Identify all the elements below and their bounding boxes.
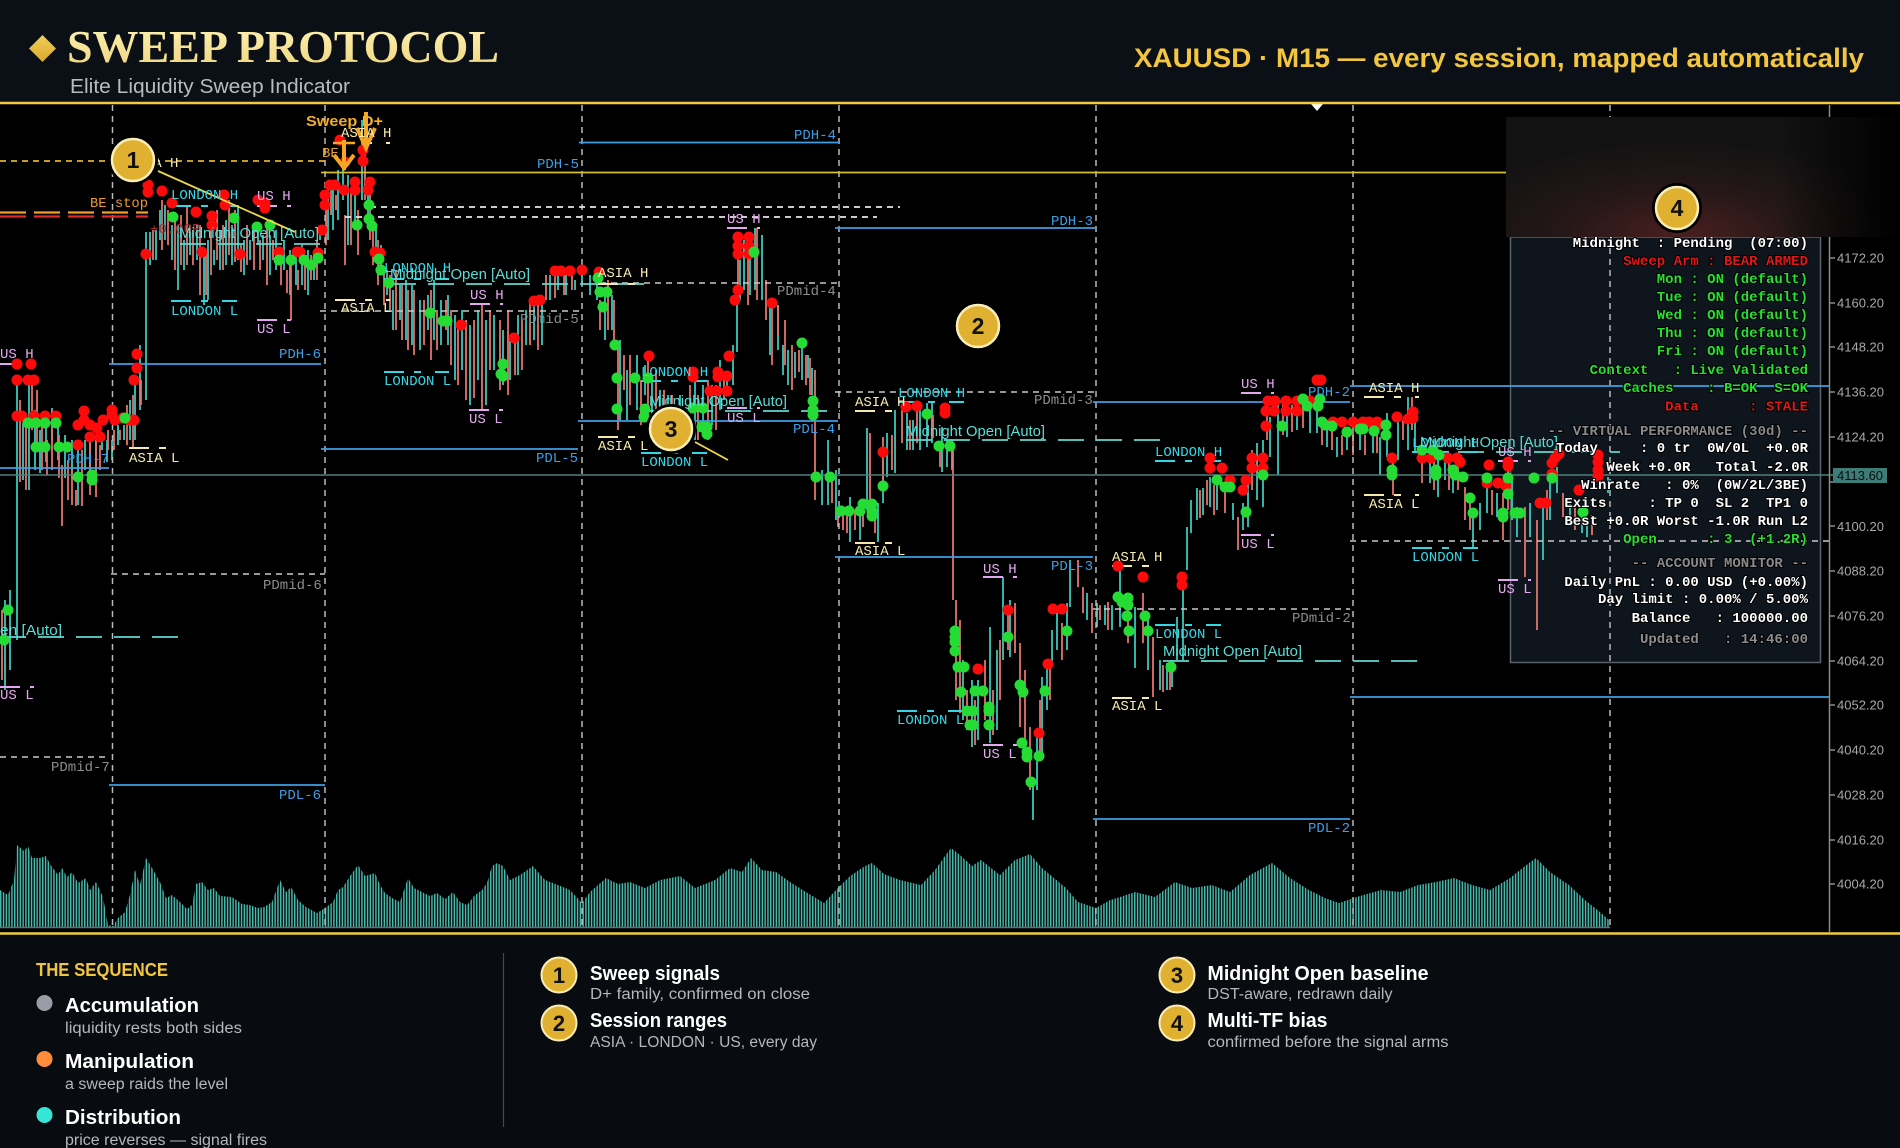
subtitle: Elite Liquidity Sweep Indicator bbox=[70, 76, 350, 98]
session labels: ASIA: ASIA L bbox=[341, 301, 391, 317]
legend item 1 bbox=[542, 958, 810, 1003]
previous-day level lines bbox=[0, 142, 1829, 819]
session labels: LONDON bbox=[171, 188, 1479, 729]
step: distribution bbox=[36, 1107, 267, 1148]
level labels: PDmid: PDmid-6 bbox=[263, 578, 322, 594]
session bracket ticks bbox=[0, 143, 1531, 745]
session labels: ASIA: ASIA L bbox=[598, 439, 648, 455]
price axis: 4160.20 bbox=[1837, 296, 1884, 310]
badge 2 bbox=[953, 301, 1003, 351]
panel text: status readout: Wed : ON (default) bbox=[1657, 308, 1808, 324]
step: accumulation: Accumulation bbox=[65, 995, 199, 1017]
session labels: US: US L bbox=[0, 688, 34, 704]
session labels: LONDON: LONDON H bbox=[384, 261, 451, 277]
level labels: PDH and PDL: PDL-4 bbox=[793, 422, 835, 438]
session labels: US: US H bbox=[983, 562, 1017, 578]
session labels: US: US H bbox=[257, 189, 291, 205]
session labels: ASIA: ASIA H bbox=[128, 156, 178, 172]
session labels: US: US H bbox=[727, 212, 761, 228]
chart background bbox=[0, 105, 1900, 932]
badge 1 bbox=[108, 135, 158, 185]
legend item 2: ASIA · LONDON · US, every day bbox=[590, 1034, 817, 1051]
level labels: PDH and PDL: PDH-4 bbox=[794, 128, 836, 144]
level labels: PDH and PDL: PDL-2 bbox=[1308, 821, 1350, 837]
level labels: PDmid: PDmid-4 bbox=[777, 284, 836, 300]
sequence heading: THE SEQUENCE bbox=[36, 960, 168, 980]
legend item 1: 1 bbox=[553, 963, 565, 988]
panel text: status readout: Today : 0 tr 0W/0L +0.0R bbox=[1556, 441, 1809, 457]
legend item 2 bbox=[542, 1006, 817, 1051]
legend item 2: Session ranges bbox=[590, 1010, 727, 1032]
session labels: US bbox=[0, 189, 1532, 763]
legend item 4: confirmed before the signal arms bbox=[1208, 1034, 1449, 1051]
price axis: 4124.20 bbox=[1837, 430, 1884, 444]
session labels: ASIA: ASIA H bbox=[341, 126, 391, 142]
session labels: US: US H bbox=[0, 347, 34, 363]
level labels: PDH and PDL: PDH-7 bbox=[67, 452, 109, 468]
level labels: PDmid: PDmid-2 bbox=[1292, 611, 1351, 627]
price axis: 4076.20 bbox=[1837, 608, 1884, 624]
session labels: LONDON: LONDON H bbox=[641, 365, 708, 381]
price axis: 4016.20 bbox=[1837, 832, 1884, 848]
top marker triangle bbox=[1311, 104, 1323, 111]
session labels: LONDON: LONDON H bbox=[898, 386, 965, 402]
panel: status background bbox=[1510, 237, 1820, 662]
badge 2: 2 bbox=[972, 313, 984, 339]
legend item 2: 2 bbox=[553, 1011, 565, 1036]
panel text: status readout: Open : 3 (+1.2R) bbox=[1623, 532, 1808, 548]
step: accumulation bbox=[36, 995, 242, 1037]
signal dots: bullish green bbox=[4, 205, 1583, 782]
header tagline: XAUUSD · M15 — every session, mapped automatically bbox=[1134, 43, 1864, 73]
midnight open labels bbox=[0, 225, 1558, 660]
midnight open labels: Midnight Open [Auto] bbox=[906, 423, 1045, 440]
panel text: status readout: Thu : ON (default) bbox=[1657, 326, 1808, 342]
panel text: status readout: Caches : B=OK S=OK bbox=[1623, 381, 1809, 397]
chart labels: sweep and stop: Sweep D+ bbox=[306, 113, 383, 130]
panel text: status readout: Updated : 14:46:00 bbox=[1640, 632, 1808, 648]
panel text: status readout: Fri : ON (default) bbox=[1657, 344, 1808, 360]
midnight open labels: Midnight Open [Auto] bbox=[649, 393, 787, 410]
legend item 4: Multi-TF bias bbox=[1208, 1010, 1328, 1032]
price axis: 4136.20 bbox=[1837, 384, 1884, 400]
annotation leader lines bbox=[158, 171, 728, 460]
icon: gold diamond bbox=[29, 35, 56, 62]
session labels: US: US H bbox=[1498, 445, 1532, 461]
step: accumulation: liquidity rests both sides bbox=[65, 1020, 242, 1037]
panel text: status readout: Daily PnL : 0.00 USD (+0.00%) bbox=[1564, 575, 1808, 591]
chart labels: sweep and stop: BE stop bbox=[90, 196, 148, 212]
price axis: 4004.20 bbox=[1837, 876, 1884, 892]
session labels: LONDON: LONDON L bbox=[897, 713, 964, 729]
session labels: LONDON: LONDON L bbox=[1155, 627, 1222, 643]
session labels: US: US L bbox=[727, 411, 761, 427]
panel text: status readout: Midnight : Pending (07:00) bbox=[1573, 236, 1808, 252]
legend item 3: 3 bbox=[1171, 963, 1183, 988]
session labels: US: US H bbox=[470, 288, 504, 304]
panel text: status readout bbox=[1548, 236, 1809, 648]
session labels: LONDON: LONDON L bbox=[641, 455, 708, 471]
session labels: US: US H bbox=[1241, 377, 1275, 393]
legend item 3: Midnight Open baseline bbox=[1208, 963, 1428, 985]
badge 3: 3 bbox=[665, 416, 677, 442]
price candles: bearish wicks bbox=[2, 130, 1592, 790]
level labels: PDH and PDL: PDL-3 bbox=[1051, 559, 1093, 575]
panel text: status readout: Best +0.0R Worst -1.0R Run L2 bbox=[1564, 514, 1808, 530]
session labels: ASIA: ASIA L bbox=[1112, 699, 1162, 715]
legend item 4: 4 bbox=[1171, 1011, 1184, 1036]
icon: sweep down arrows bbox=[333, 112, 375, 170]
price axis: 4148.20 bbox=[1837, 340, 1884, 354]
session labels: LONDON: LONDON L bbox=[1412, 550, 1479, 566]
panel text: status readout: Tue : ON (default) bbox=[1657, 290, 1808, 306]
midnight open labels: Midnight Open [Auto] bbox=[1163, 643, 1302, 660]
panel text: status readout: Balance : 100000.00 bbox=[1632, 611, 1808, 627]
badge 4: 4 bbox=[1671, 195, 1684, 221]
session labels: LONDON: LONDON H bbox=[171, 188, 238, 204]
level labels: PDH and PDL: PDH-2 bbox=[1308, 385, 1350, 401]
price candles: bullish wicks bbox=[5, 120, 1608, 820]
session labels: ASIA: ASIA H bbox=[1112, 550, 1162, 566]
price axis: 4172.20 bbox=[1837, 250, 1884, 266]
footer band bbox=[0, 935, 1900, 1148]
footer divider bbox=[502, 953, 504, 1127]
level labels: PDmid: PDmid-7 bbox=[51, 760, 110, 776]
price axis: 4100.20 bbox=[1837, 519, 1884, 534]
blurred redaction box bbox=[1506, 117, 1900, 237]
panel text: status readout: -- VIRTUAL PERFORMANCE (30d) -- bbox=[1548, 424, 1808, 440]
panel text: status readout: Context : Live Validated bbox=[1590, 363, 1808, 379]
badge 1: 1 bbox=[127, 147, 140, 173]
session labels: ASIA: ASIA L bbox=[1369, 497, 1419, 513]
session labels: US: US L bbox=[257, 322, 291, 338]
session labels: US: US L bbox=[469, 412, 503, 428]
badge 3 bbox=[646, 404, 696, 454]
legend item 1: D+ family, confirmed on close bbox=[590, 986, 810, 1003]
session separators bbox=[112, 105, 1610, 925]
header band bbox=[0, 0, 1900, 103]
legend item 4 bbox=[1160, 1006, 1449, 1051]
step: manipulation bbox=[36, 1051, 228, 1093]
session labels: US: US L bbox=[1241, 537, 1275, 553]
panel text: status readout: Data : STALE bbox=[1665, 400, 1808, 416]
step: manipulation: a sweep raids the level bbox=[65, 1076, 228, 1093]
session labels: ASIA bbox=[128, 126, 1419, 715]
level labels: PDmid: PDmid-5 bbox=[520, 312, 579, 328]
current price line bbox=[0, 474, 1833, 476]
midnight open labels: Midnight Open [Auto] bbox=[179, 225, 319, 242]
step: manipulation: Manipulation bbox=[65, 1051, 194, 1073]
legend item 3 bbox=[1160, 958, 1428, 1003]
price axis: 4028.20 bbox=[1837, 788, 1884, 802]
session labels: ASIA: ASIA L bbox=[855, 544, 905, 560]
level labels: PDmid bbox=[51, 284, 1351, 776]
legend item 1: Sweep signals bbox=[590, 963, 720, 985]
title: SWEEP PROTOCOL bbox=[67, 22, 499, 72]
panel text: status readout: Winrate : 0% (0W/2L/3BE) bbox=[1581, 478, 1808, 494]
price axis: 4040.20 bbox=[1837, 742, 1884, 758]
volume histogram bbox=[0, 845, 1610, 927]
signal dots: bearish red bbox=[17, 140, 1598, 733]
panel text: status readout: -- ACCOUNT MONITOR -- bbox=[1632, 556, 1808, 572]
badge 4 bbox=[1652, 183, 1702, 233]
session labels: ASIA: ASIA L bbox=[129, 451, 179, 467]
session labels: US: US L bbox=[983, 747, 1017, 763]
midnight open labels: Midnight Open [Auto] bbox=[390, 266, 530, 283]
level labels: PDH and PDL: PDL-6 bbox=[279, 788, 321, 804]
level labels: PDH and PDL: PDH-6 bbox=[279, 347, 321, 363]
session labels: ASIA: ASIA H bbox=[598, 266, 648, 282]
step: distribution: Distribution bbox=[65, 1107, 181, 1129]
session labels: ASIA: ASIA H bbox=[855, 395, 905, 411]
panel text: status readout: Mon : ON (default) bbox=[1657, 272, 1808, 288]
chart labels: sweep and stop: +0.00R bbox=[150, 222, 201, 238]
midnight open labels: en [Auto] bbox=[0, 622, 62, 639]
panel text: status readout: Day limit : 0.00% / 5.00% bbox=[1598, 592, 1809, 608]
panel text: status readout: Exits : TP 0 SL 2 TP1 0 bbox=[1564, 496, 1808, 512]
panel text: status readout: Sweep Arm : BEAR ARMED bbox=[1623, 254, 1808, 270]
midnight open labels: Midnight Open [Auto] bbox=[1420, 434, 1558, 451]
session labels: LONDON: LONDON L bbox=[171, 304, 238, 320]
panel: the sequence bbox=[36, 960, 267, 1148]
gold rule lines bbox=[0, 103, 1900, 934]
chart labels: sweep and stop bbox=[90, 113, 383, 238]
session labels: ASIA: ASIA H bbox=[1369, 381, 1419, 397]
price axis: 4088.20 bbox=[1837, 564, 1884, 578]
level labels: PDH and PDL: PDL-5 bbox=[536, 451, 578, 467]
chart labels: sweep and stop: BE bbox=[322, 146, 339, 162]
legend item 3: DST-aware, redrawn daily bbox=[1208, 986, 1393, 1003]
current price tag: 4113.60 bbox=[1837, 468, 1883, 483]
level labels: PDH and PDL: PDH-3 bbox=[1051, 214, 1093, 230]
price axis: 4064.20 bbox=[1837, 654, 1884, 668]
level labels: PDH and PDL bbox=[67, 128, 1350, 837]
level labels: PDH and PDL: PDH-5 bbox=[537, 157, 579, 173]
level labels: PDmid: PDmid-3 bbox=[1034, 393, 1093, 409]
session labels: LONDON: LONDON H bbox=[1155, 445, 1222, 461]
price axis bbox=[0, 105, 1887, 932]
price axis: 4052.20 bbox=[1837, 698, 1884, 712]
panel text: status readout: Week +0.0R Total -2.0R bbox=[1606, 460, 1809, 476]
session labels: LONDON: LONDON H bbox=[1412, 436, 1479, 452]
session labels: LONDON: LONDON L bbox=[384, 374, 451, 390]
session labels: US: US L bbox=[1498, 582, 1532, 598]
